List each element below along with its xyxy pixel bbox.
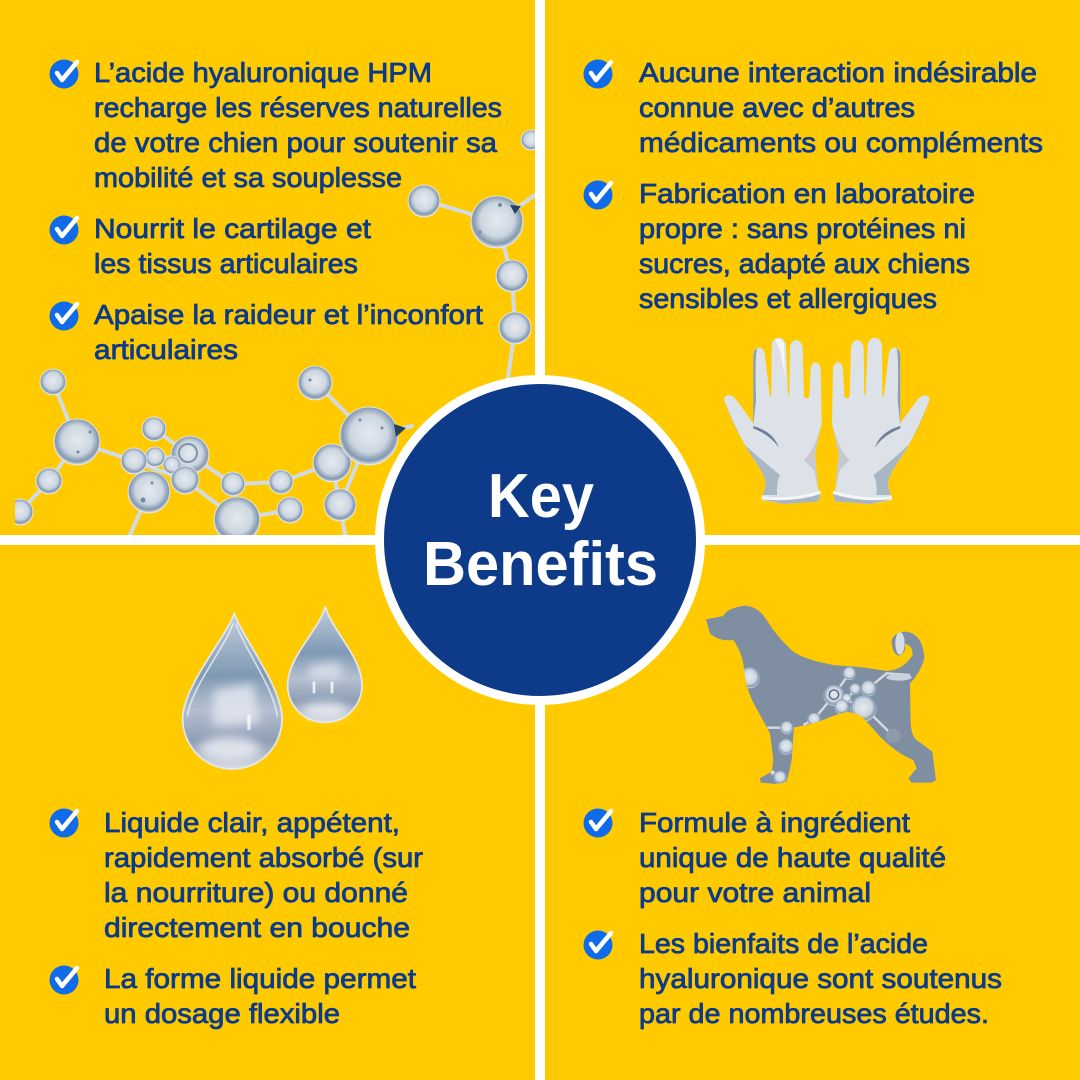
benefit text xyxy=(94,299,483,365)
icon: water drops xyxy=(183,606,362,769)
benefit text: articulaires xyxy=(94,334,238,365)
benefit text xyxy=(639,57,1043,158)
check icon xyxy=(50,302,78,330)
check icon xyxy=(584,60,612,88)
check icon xyxy=(584,930,612,960)
left glove xyxy=(724,338,822,504)
benefit text: rapidement absorbé (sur xyxy=(104,842,423,873)
center circle badge xyxy=(380,380,700,700)
benefit text: un dosage flexible xyxy=(104,998,340,1029)
icon: dog silhouette with molecules xyxy=(706,606,936,784)
benefit text: Nourrit le cartilage et xyxy=(94,213,371,244)
benefit text: Fabrication en laboratoire xyxy=(639,178,975,209)
benefit text: connue avec d’autres xyxy=(639,92,915,123)
benefit text: de votre chien pour soutenir sa xyxy=(94,127,498,158)
benefit text: par de nombreuses études. xyxy=(639,998,989,1029)
benefit text: propre : sans protéines ni xyxy=(639,213,966,244)
benefit text: Liquide clair, appétent, xyxy=(104,807,400,838)
benefit text: directement en bouche xyxy=(104,912,410,943)
benefit text: pour votre animal xyxy=(639,877,871,908)
benefit text: Aucune interaction indésirable xyxy=(639,57,1037,88)
benefit text: Les bienfaits de l’acide xyxy=(639,928,928,959)
benefit text xyxy=(639,928,1002,1029)
check icon xyxy=(584,808,612,838)
benefit text: recharge les réserves naturelles xyxy=(94,92,502,123)
benefit text: sucres, adapté aux chiens xyxy=(639,248,970,279)
panel: bottom right benefits xyxy=(584,807,1002,1029)
panel: top right benefits xyxy=(584,57,1043,314)
benefit text xyxy=(639,807,946,908)
check icon xyxy=(50,808,78,838)
molecule illustration xyxy=(7,130,541,543)
benefit text: hyaluronique sont soutenus xyxy=(639,963,1002,994)
title xyxy=(423,462,658,599)
benefit text xyxy=(104,963,416,1029)
benefit text: unique de haute qualité xyxy=(639,842,946,873)
check icon xyxy=(584,180,612,210)
icon: gloves xyxy=(724,338,930,504)
benefit text: sensibles et allergiques xyxy=(639,283,937,314)
benefit text: L’acide hyaluronique HPM xyxy=(94,57,432,88)
check icon xyxy=(50,966,78,994)
small drop xyxy=(288,606,362,722)
benefit text xyxy=(94,57,502,193)
title: Benefits xyxy=(423,530,658,599)
benefit text xyxy=(94,213,371,279)
benefit text: les tissus articulaires xyxy=(94,248,358,279)
benefit text: La forme liquide permet xyxy=(104,963,416,994)
panel: top left benefits xyxy=(50,57,502,365)
benefit text xyxy=(639,178,975,314)
benefit text: médicaments ou compléments xyxy=(639,127,1043,158)
title: Key xyxy=(488,462,594,531)
panel: bottom left benefits xyxy=(50,807,423,1029)
benefit text: Formule à ingrédient xyxy=(639,807,910,838)
large drop xyxy=(183,613,282,769)
right glove xyxy=(832,338,930,504)
benefit text: Apaise la raideur et l’inconfort xyxy=(94,299,483,330)
benefit text: la nourriture) ou donné xyxy=(104,877,408,908)
benefit text xyxy=(104,807,423,943)
check icon xyxy=(50,216,78,244)
check icon xyxy=(50,60,78,88)
benefit text: mobilité et sa souplesse xyxy=(94,162,402,193)
